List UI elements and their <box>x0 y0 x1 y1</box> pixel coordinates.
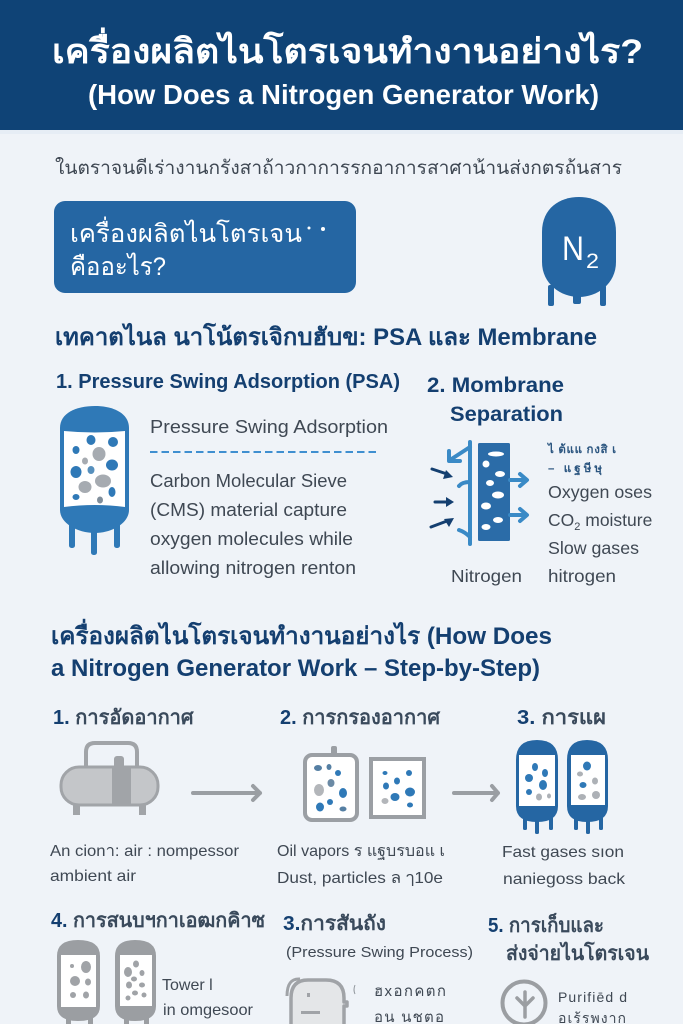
icon: N2 tank: N <box>562 230 584 268</box>
callout: what is a nitrogen generator <box>54 201 356 293</box>
step text: naniegoss back <box>503 871 626 888</box>
subtitle: (How Does a Nitrogen Generator Work) <box>88 79 599 110</box>
section heading: step by step: a Nitrogen Generator Work – Step-by-Step) <box>51 655 540 682</box>
step text: Tower l <box>162 977 213 994</box>
step text: in omgesoor <box>163 1002 254 1019</box>
membrane text: moisture <box>580 510 652 530</box>
step heading: 4. การสนบฯกาเอฒกคิาซ <box>51 910 265 932</box>
title: เครื่องผลิตไนโตรเจนทำงานอย่างไร? <box>52 27 643 71</box>
heading: membrane: 2. Mombrane <box>427 373 564 397</box>
description text <box>150 471 356 578</box>
step text <box>50 843 240 885</box>
icon: PSA tank <box>60 406 129 555</box>
header banner <box>0 0 683 130</box>
heading: membrane: Separation <box>450 402 563 426</box>
step text <box>502 844 626 888</box>
small label: ไ ต้แแ กงสิ เ <box>546 442 616 456</box>
step heading: 3.การสันถัง <box>283 913 386 935</box>
step text <box>162 977 254 1019</box>
step text <box>374 983 446 1024</box>
icon: membrane diagram <box>431 442 527 544</box>
step text: Purifiēd d <box>558 989 627 1005</box>
step 3: separation <box>502 707 626 888</box>
arrow <box>454 786 498 800</box>
membrane text: Oxygen oses <box>548 482 652 502</box>
step 5: storage and delivery <box>488 912 649 1024</box>
description text: allowing nitrogen renton <box>150 558 356 578</box>
membrane text: CO <box>548 510 574 530</box>
icon: filter 2 <box>371 759 424 817</box>
step text <box>558 989 627 1024</box>
callout: what is a nitrogen generator: คืออะไร? <box>70 252 166 281</box>
callout: what is a nitrogen generator: เครื่องผลิตไนโตรเจน <box>70 216 302 248</box>
description text: Carbon Molecular Sieve <box>150 471 347 491</box>
step heading: 1. การอัดอากาศ <box>53 707 195 729</box>
step text <box>277 843 445 887</box>
membrane text <box>451 482 652 586</box>
section heading: step by step <box>51 618 552 682</box>
step 1: air compression <box>50 707 260 885</box>
icon: compressor <box>61 743 158 815</box>
icon: twin towers <box>516 740 608 834</box>
intro text: ในตราจนดีเร่างานกรังสาถ้าวกาการรกอาการสาศาน้านส่งกตรถ้นสาร <box>55 157 622 179</box>
small label <box>546 442 616 476</box>
heading: PSA: 1. Pressure Swing Adsorption (PSA) <box>56 371 400 393</box>
step 2: air filtration <box>277 707 498 887</box>
step text: ambient air <box>50 868 137 885</box>
step subtitle: (Pressure Swing Process) <box>286 944 473 961</box>
panel: membrane separation <box>427 373 652 586</box>
step text: Oil vapors ร แฐบรบอแ เ <box>277 843 445 860</box>
icon: N2 tank: 2 <box>586 250 599 273</box>
membrane text: hitrogen <box>548 566 616 586</box>
icon: grey tank <box>287 979 355 1024</box>
description label: Pressure Swing Adsorption <box>150 417 388 437</box>
description text: (CMS) material capture <box>150 500 347 520</box>
membrane text: 2 <box>574 521 580 533</box>
section heading: step by step: เครื่องผลิตไนโตรเจนทำงานอย่างไร (How Does <box>51 618 552 650</box>
membrane text: Nitrogen <box>451 566 522 586</box>
step heading: 5. การเก็บและ <box>488 912 604 937</box>
icon: filter 1 <box>305 746 357 820</box>
step heading: 2. การกรองอากาศ <box>280 707 441 729</box>
small label: – แฐษีษุ <box>548 462 602 476</box>
membrane text: Slow gases <box>548 538 639 558</box>
step text: ฮxอกคตก <box>374 983 446 1000</box>
step 3b: pressure swing process <box>283 913 473 1024</box>
step text: An cionา: air : nompessor <box>50 843 240 860</box>
step heading <box>488 912 649 965</box>
step text: Fast gases sıon <box>502 844 624 861</box>
step heading: 3. การแผ <box>517 707 606 729</box>
step text: Dust, particles ล ๅ10e <box>277 870 443 887</box>
icon: N2 tank <box>542 197 616 306</box>
section heading: PSA and Membrane: เทคาตไนล นาโน้ตรเจิกบฮับข: PSA และ Membrane <box>55 322 597 351</box>
panel: PSA <box>56 371 400 578</box>
icon: purifier <box>502 982 546 1024</box>
step 4: tower switching <box>51 910 265 1024</box>
heading: membrane <box>427 373 564 426</box>
arrow <box>193 786 260 800</box>
step heading: ส่งจ่ายไนโตรเจน <box>506 941 649 965</box>
description text: oxygen molecules while <box>150 529 353 549</box>
icon: grey towers <box>57 940 156 1024</box>
